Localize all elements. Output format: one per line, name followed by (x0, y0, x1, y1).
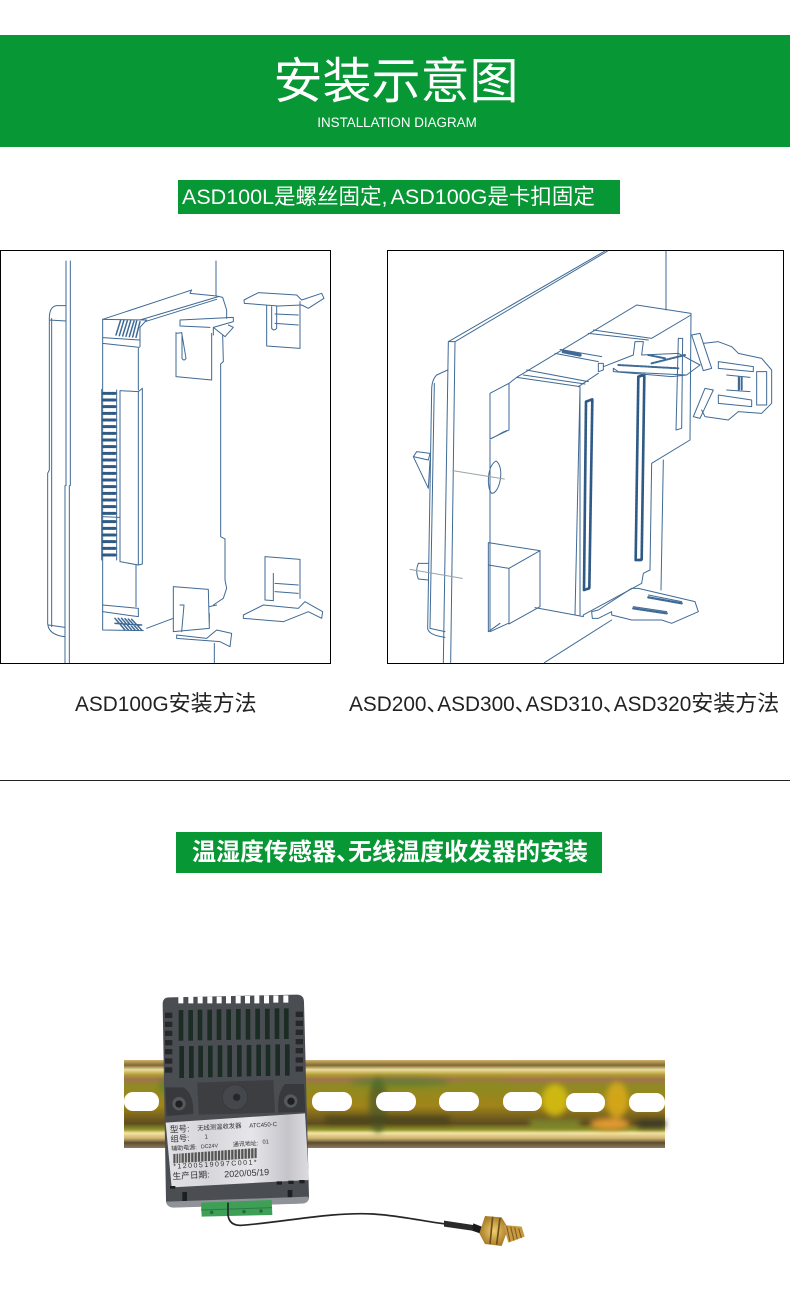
device label: ATC450-C (249, 1122, 278, 1130)
title: 安装示意图 (273, 55, 518, 109)
mounting ears and centre recess (197, 1080, 275, 1115)
DIN rail (124, 1060, 665, 1148)
antenna cable (228, 1203, 480, 1228)
heading: sensor installation (176, 832, 602, 873)
divider (0, 780, 790, 781)
device label: 生产日期: (172, 1168, 210, 1181)
heading: sensor installation: 温湿度传感器、无线温度收发器的安装 (192, 839, 588, 866)
device label: 辅助电源: (171, 1143, 197, 1153)
device label: DC24V (201, 1143, 219, 1150)
subtitle: INSTALLATION DIAGRAM (317, 115, 477, 130)
device label: 无线测温收发器 (197, 1121, 242, 1132)
heading: fixing methods: ASD100L是螺丝固定,ASD100G是卡扣固定 (182, 185, 595, 209)
bottom notches (170, 1180, 305, 1202)
device label: 2020/05/19 (224, 1167, 269, 1179)
green terminal block (201, 1200, 272, 1217)
device label: *1200519097C001* (173, 1159, 258, 1171)
device label: 型号: (170, 1123, 190, 1135)
header band (0, 35, 790, 147)
device label (166, 1113, 309, 1187)
vent slots (179, 1008, 290, 1078)
photo: transceiver on DIN rail (124, 994, 670, 1246)
diagram: ASD100G installation (0, 250, 331, 664)
heading: fixing methods (178, 180, 620, 214)
barcode (173, 1148, 257, 1163)
diagram: ASD200/300/310/320 installation (387, 250, 784, 664)
device label: 组号: (170, 1133, 190, 1144)
device label: 通讯地址: (233, 1139, 259, 1149)
SMA connector (479, 1216, 525, 1246)
device label: 01 (262, 1139, 269, 1146)
device label: 1 (204, 1134, 209, 1141)
caption: ASD100G: ASD100G安装方法 (75, 691, 257, 716)
transceiver device (163, 995, 525, 1246)
caption: ASD200 series: ASD200、ASD300、ASD310、ASD320安装方法 (349, 691, 779, 716)
